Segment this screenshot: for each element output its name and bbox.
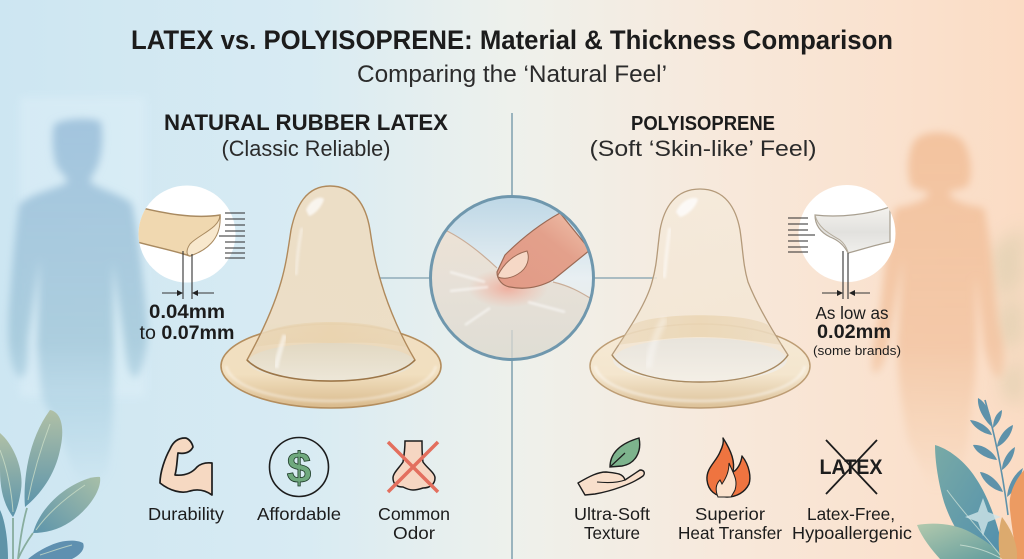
- heading: latex: (Classic Reliable): [222, 136, 390, 161]
- silhouette: man: [8, 119, 147, 490]
- silhouette: woman: [872, 132, 1004, 490]
- magnifier: finger pressing: [425, 196, 594, 362]
- feature: common odor: [378, 441, 450, 543]
- feature: latex-free: Hypoallergenic: [792, 523, 912, 543]
- feature: durability: [148, 438, 224, 524]
- feature: superior heat transfer: Superior: [695, 504, 765, 524]
- feature: common odor: Odor: [393, 523, 435, 543]
- title: LATEX vs. POLYISOPRENE: Material & Thickness Comparison: [131, 25, 893, 55]
- feature: affordable: Affordable: [257, 504, 341, 524]
- heading: latex: NATURAL RUBBER LATEX: [164, 110, 448, 135]
- feature: ultra-soft texture: Texture: [584, 523, 640, 543]
- leaves: bottom left: [0, 410, 100, 559]
- feature: durability: Durability: [148, 504, 224, 524]
- center divider: [378, 113, 657, 559]
- polyisoprene thickness callout: (some brands): [813, 343, 901, 358]
- feature: latex-free: [792, 440, 912, 543]
- icon: crossed nose: [388, 441, 438, 492]
- leaves: bottom right: [917, 398, 1024, 559]
- icon: crossed latex: LATEX: [820, 456, 882, 479]
- icon: flame: [707, 438, 750, 497]
- latex thickness callout: 0.04mm: [149, 301, 225, 323]
- polyisoprene thickness callout: As low as: [816, 303, 889, 323]
- icon: hand with leaf: [578, 438, 644, 495]
- feature: ultra-soft texture: Ultra-Soft: [574, 504, 650, 524]
- heading: polyisoprene: (Soft ‘Skin-like’ Feel): [590, 136, 816, 161]
- polyisoprene thickness callout: [788, 185, 901, 358]
- feature: common odor: Common: [378, 504, 450, 524]
- feature: latex-free: Latex-Free,: [807, 504, 895, 524]
- feature: ultra-soft texture: [574, 438, 650, 543]
- polyisoprene thickness callout: 0.02mm: [817, 321, 891, 343]
- subtitle: Comparing the ‘Natural Feel’: [357, 61, 667, 88]
- latex condom: [221, 186, 441, 408]
- latex thickness callout: [138, 186, 245, 339]
- heading: polyisoprene: POLYISOPRENE: [631, 113, 775, 135]
- polyisoprene condom: [590, 189, 810, 408]
- feature: affordable: [257, 438, 341, 524]
- feature: superior heat transfer: [678, 438, 782, 543]
- heading: polyisoprene: [590, 113, 816, 161]
- icon: dollar coin: $: [287, 444, 311, 493]
- icon: flexed arm: [160, 438, 212, 495]
- latex thickness callout: to 0.07mm: [140, 322, 234, 344]
- heading: latex: [164, 110, 448, 161]
- feature: superior heat transfer: Heat Transfer: [678, 523, 782, 543]
